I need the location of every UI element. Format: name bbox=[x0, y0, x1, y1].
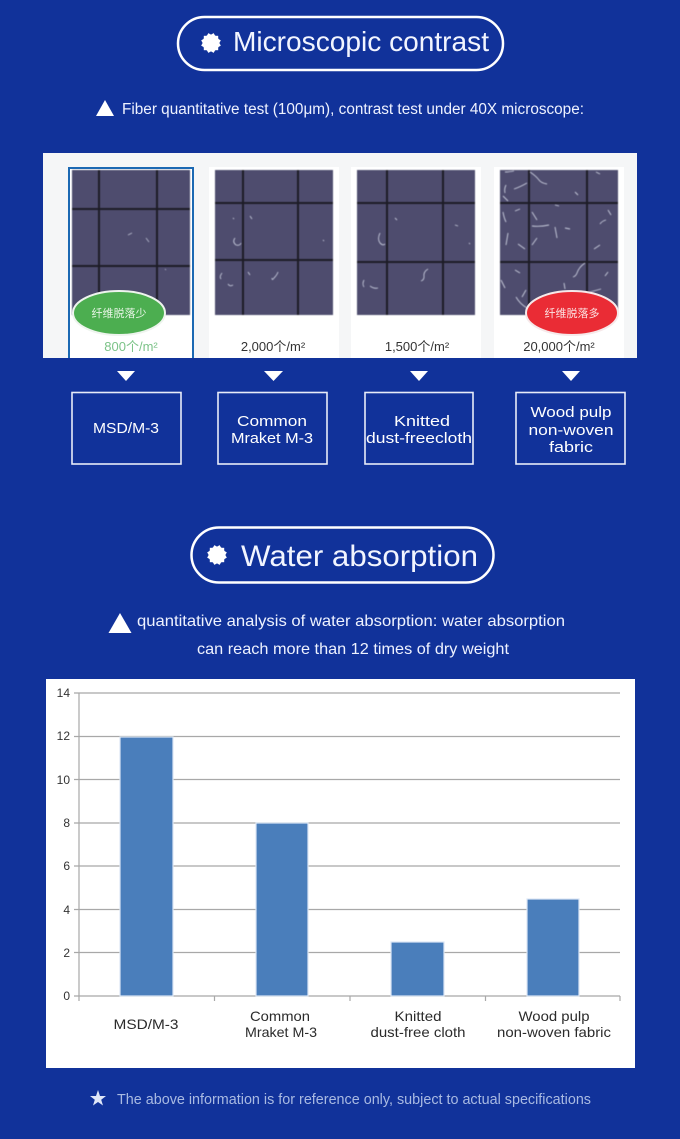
x axis labels: MSD/M-3 bbox=[114, 1016, 179, 1032]
y axis labels: 2 bbox=[63, 946, 70, 960]
label text: material names: Common bbox=[237, 413, 307, 430]
panel: water absorption bar chart bbox=[46, 679, 635, 1068]
y axis labels: 0 bbox=[63, 989, 70, 1003]
footnote bbox=[90, 1090, 591, 1108]
heading pill outline bbox=[192, 528, 494, 582]
label text: material names: dust-freecloth bbox=[366, 430, 472, 447]
micrograph: Common Mraket M-3 bbox=[215, 170, 333, 315]
count labels: 800个/m² bbox=[104, 339, 158, 354]
bar: MSD/M-3 = 12 bbox=[120, 737, 173, 996]
x axis labels: non-woven fabric bbox=[497, 1024, 611, 1040]
subtitle text: can reach more than 12 times of dry weight bbox=[197, 641, 510, 658]
micrograph: Knitted dust-free cloth bbox=[357, 170, 475, 315]
bar: Knitted dust-free cloth = 2.5 bbox=[391, 942, 444, 996]
bar: Wood pulp non-woven fabric = 4.5 bbox=[527, 899, 579, 996]
micrograph: MSD/M-3 bbox=[72, 170, 190, 315]
heading pill outline bbox=[178, 17, 503, 70]
count labels: 2,000个/m² bbox=[241, 339, 306, 354]
label text: material names: Knitted bbox=[394, 413, 450, 430]
label text: material names: non-woven bbox=[528, 422, 614, 439]
micrograph: Wood pulp non-woven fabric bbox=[500, 170, 618, 315]
x axis labels: Wood pulp bbox=[518, 1008, 590, 1024]
arrows: pointers from images to labels bbox=[117, 371, 580, 381]
icon: star bbox=[90, 1090, 106, 1106]
icon: triangle bullet bbox=[108, 613, 132, 633]
label boxes: material names bbox=[72, 392, 625, 464]
icon: triangle bullet bbox=[96, 100, 114, 116]
y axis labels: 4 bbox=[63, 903, 70, 917]
x axis labels: Knitted bbox=[394, 1008, 442, 1024]
grid lines bbox=[74, 693, 620, 1001]
footnote text: The above information is for reference only, subject to actual specifications bbox=[117, 1091, 591, 1108]
subtitle text: quantitative analysis of water absorption: water absorption bbox=[137, 613, 565, 630]
x axis labels: Common bbox=[250, 1008, 310, 1024]
section: water absorption heading bbox=[192, 528, 494, 582]
bar: Common Mraket M-3 = 8 bbox=[256, 823, 308, 996]
count labels: 1,500个/m² bbox=[385, 339, 450, 354]
x axis labels bbox=[114, 1008, 611, 1040]
badge: high fiber shedding: 纤维脱落多 bbox=[544, 306, 600, 320]
label text: material names: MSD/M-3 bbox=[93, 420, 159, 437]
label text: material names: Mraket M-3 bbox=[231, 430, 313, 447]
badge: low fiber shedding: 纤维脱落少 bbox=[92, 306, 146, 320]
y axis labels: 12 bbox=[57, 729, 70, 743]
subtitle text bbox=[137, 613, 565, 658]
icon: badge star bbox=[201, 33, 221, 53]
highlight frame: MSD/M-3 column bbox=[69, 168, 193, 358]
y axis labels bbox=[57, 686, 70, 1003]
count labels: 20,000个/m² bbox=[523, 339, 595, 354]
subtitle: fiber test description bbox=[96, 100, 584, 118]
subtitle: water absorption description bbox=[108, 613, 565, 658]
x axis labels: dust-free cloth bbox=[370, 1024, 466, 1040]
label text: material names bbox=[93, 404, 614, 456]
y axis labels: 6 bbox=[63, 859, 70, 873]
label text: material names: Wood pulp bbox=[530, 404, 612, 421]
label text: material names: fabric bbox=[549, 439, 594, 456]
panel: microscope comparison images bbox=[43, 153, 637, 358]
badge: high fiber shedding bbox=[526, 291, 618, 335]
count labels bbox=[104, 339, 595, 354]
heading text: Microscopic contrast bbox=[233, 26, 489, 57]
heading text: Water absorption bbox=[241, 540, 478, 573]
subtitle text: Fiber quantitative test (100μm), contrast test under 40X microscope: bbox=[122, 101, 584, 118]
y axis labels: 10 bbox=[57, 773, 70, 787]
icon: badge star bbox=[207, 545, 227, 565]
x axis labels: Mraket M-3 bbox=[245, 1024, 317, 1040]
y axis labels: 14 bbox=[57, 686, 70, 700]
section: microscopic contrast heading bbox=[178, 17, 503, 70]
badge: low fiber shedding bbox=[73, 291, 165, 335]
y axis labels: 8 bbox=[63, 816, 70, 830]
